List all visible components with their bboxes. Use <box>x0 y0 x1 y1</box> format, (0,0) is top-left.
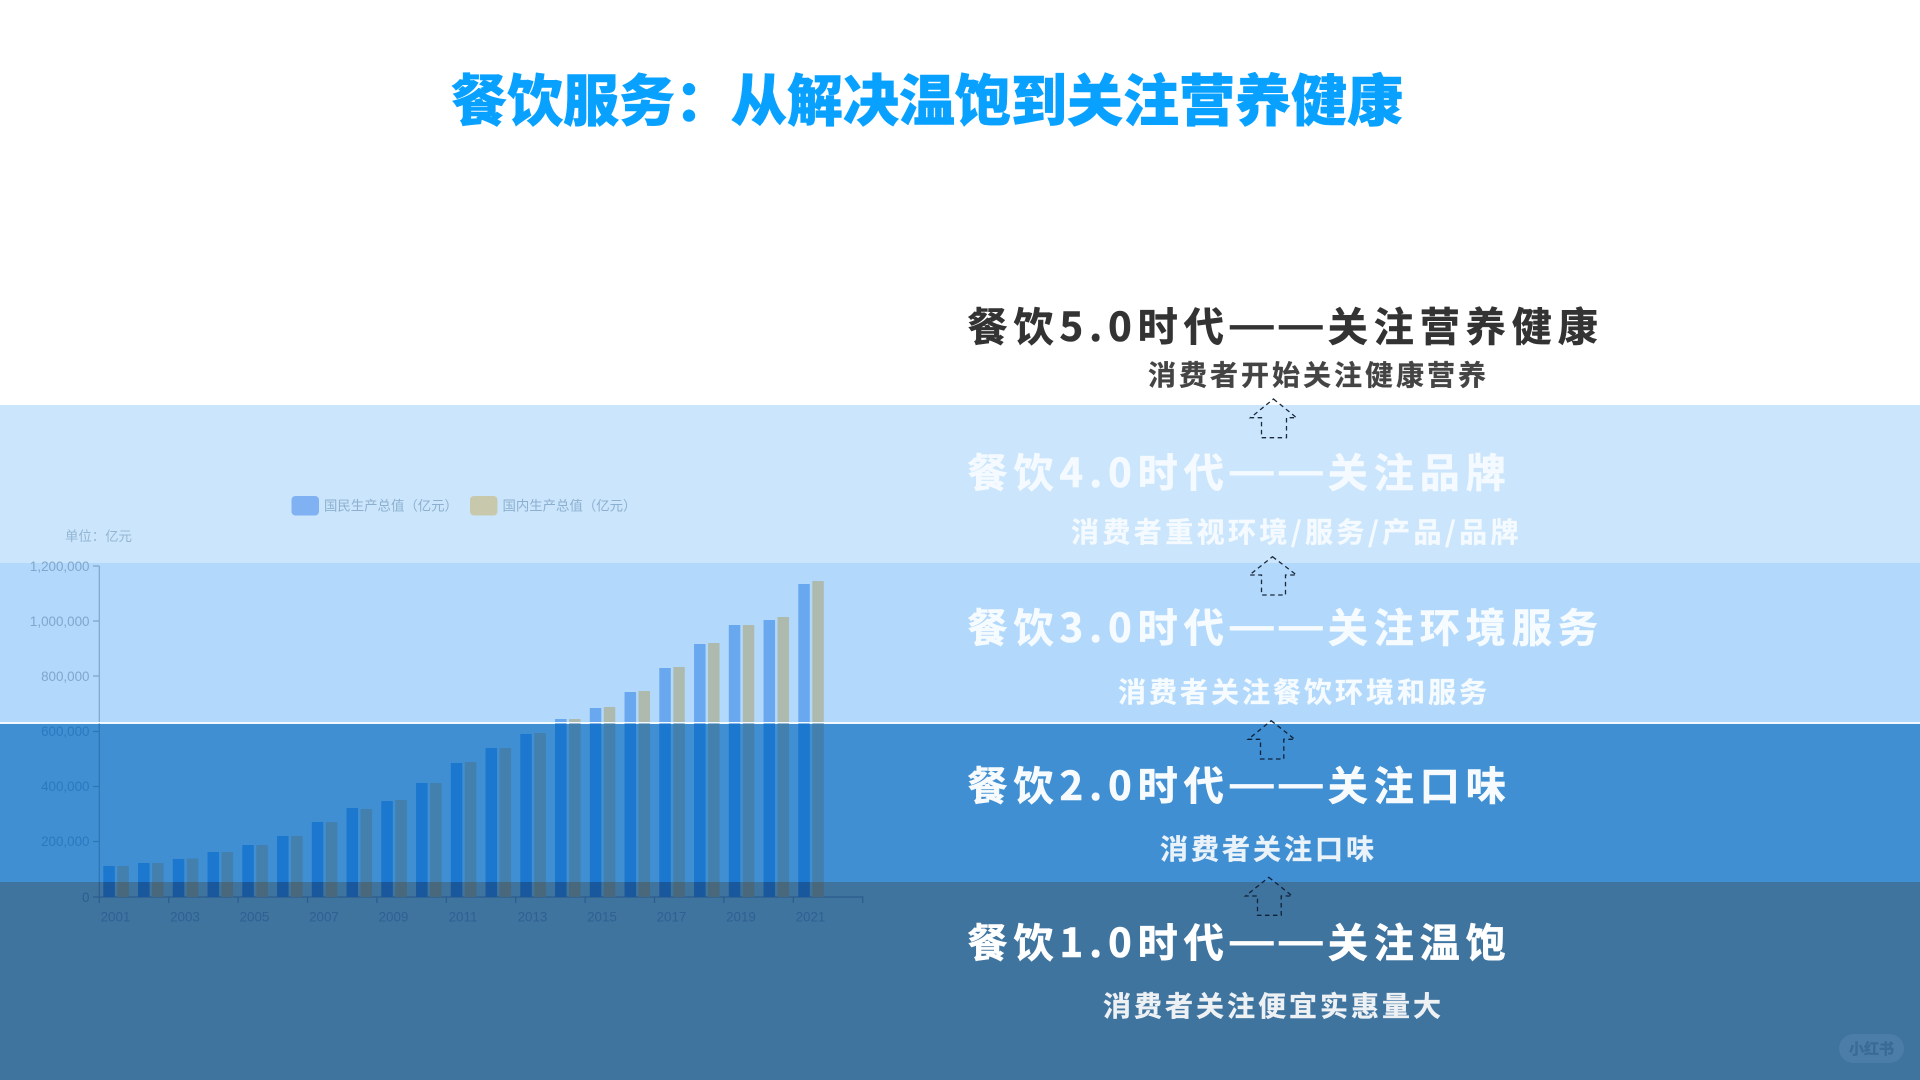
x axis labels: 2007 <box>309 910 339 924</box>
legend: 国内生产总值: 国内生产总值（亿元） <box>502 494 636 514</box>
arrow: 4.0 to 5.0 <box>1250 399 1296 438</box>
y axis labels: 600,000 <box>41 724 90 739</box>
band: era 4.0 background <box>0 405 1920 563</box>
unit label: 单位：亿元 <box>65 525 132 545</box>
band: era 3.0 background <box>0 563 1920 722</box>
x axis labels: 2003 <box>170 910 200 924</box>
x axis labels: 2005 <box>240 910 269 924</box>
title: 餐饮服务：从解决温饱到关注营养健康 <box>451 56 1403 138</box>
heading: era 1.0: 餐饮1.0时代——关注温饱 <box>968 911 1512 969</box>
heading: era 5.0: 餐饮5.0时代——关注营养健康 <box>968 295 1604 353</box>
subtext: era 4.0: 消费者重视环境/服务/产品/品牌 <box>1071 510 1522 550</box>
subtext: era 5.0: 消费者开始关注健康营养 <box>1148 354 1489 394</box>
x axis labels: 2011 <box>449 910 477 924</box>
x axis labels: 2021 <box>796 910 825 924</box>
arrow: 1.0 to 2.0 <box>1246 877 1292 915</box>
x axis labels: 2015 <box>587 910 617 924</box>
heading: era 4.0: 餐饮4.0时代——关注品牌 <box>968 440 1512 498</box>
heading: era 3.0: 餐饮3.0时代——关注环境服务 <box>968 596 1604 654</box>
legend: 国民生产总值: 国民生产总值（亿元） <box>324 494 458 514</box>
arrow: 2.0 to 3.0 <box>1248 721 1295 759</box>
bar chart: national income and GDP 2001-2021 <box>30 398 1296 922</box>
series: 国民生产总值 bars <box>103 584 810 897</box>
arrow: 3.0 to 4.0 <box>1250 557 1296 595</box>
series: 国内生产总值 bars <box>117 581 824 897</box>
y axis labels: 800,000 <box>41 669 90 684</box>
watermark <box>1839 1034 1904 1063</box>
x axis labels: 2009 <box>379 910 408 924</box>
chart axes <box>93 566 864 903</box>
y axis labels: 1,000,000 <box>30 614 90 629</box>
band: divider highlight <box>0 722 1920 724</box>
watermark: 小红书 <box>1849 1038 1894 1059</box>
x axis labels: 2019 <box>726 910 756 924</box>
y axis labels: 0 <box>82 890 90 905</box>
heading: era 2.0: 餐饮2.0时代——关注口味 <box>968 754 1512 812</box>
x axis labels: 2001 <box>101 910 130 924</box>
subtext: era 1.0: 消费者关注便宜实惠量大 <box>1103 985 1444 1025</box>
y axis labels: 1,200,000 <box>30 559 90 574</box>
y axis labels <box>30 559 90 905</box>
x axis labels: 2017 <box>657 910 686 924</box>
band: era 1.0 background <box>0 882 1920 1080</box>
subtext: era 3.0: 消费者关注餐饮环境和服务 <box>1118 671 1490 711</box>
y axis labels: 200,000 <box>41 834 90 849</box>
x axis labels: 2013 <box>518 910 547 924</box>
y axis labels: 400,000 <box>41 779 90 794</box>
x axis labels <box>101 910 825 924</box>
band: era 2.0 background <box>0 724 1920 882</box>
subtext: era 2.0: 消费者关注口味 <box>1160 828 1377 868</box>
